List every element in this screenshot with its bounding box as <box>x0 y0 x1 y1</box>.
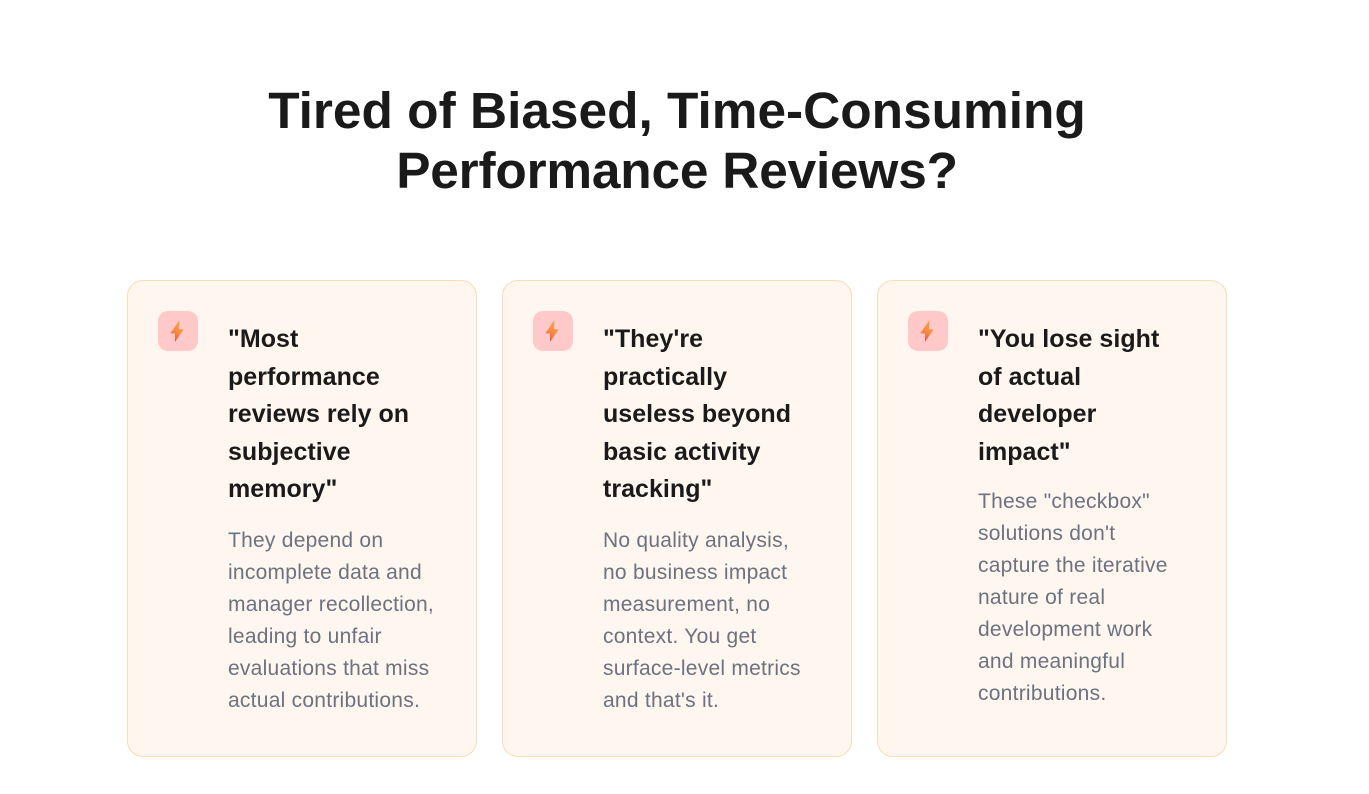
title <box>268 81 1086 199</box>
heading: reviews rely on <box>228 400 409 428</box>
title: Performance Reviews? <box>396 141 958 199</box>
panel: activity tracking <box>502 280 852 757</box>
icon: lightning bolt <box>908 311 948 351</box>
text block: evaluations that miss <box>228 657 429 680</box>
title: Tired of Biased, Time-Consuming <box>268 81 1086 139</box>
text block: no business impact <box>603 561 787 584</box>
text block: development work <box>978 618 1152 641</box>
icon: lightning bolt <box>158 311 198 351</box>
icon: lightning bolt <box>533 311 573 351</box>
text block: actual contributions. <box>228 689 420 712</box>
heading <box>228 325 409 503</box>
text block: and that's it. <box>603 689 719 712</box>
text block: manager recollection, <box>228 593 434 616</box>
text block: capture the iterative <box>978 554 1168 577</box>
heading: impact" <box>978 438 1071 466</box>
heading: tracking" <box>603 475 712 503</box>
heading: "Most <box>228 325 298 353</box>
text block: These "checkbox" <box>978 490 1150 513</box>
heading: memory" <box>228 475 337 503</box>
heading: performance <box>228 362 380 390</box>
panel: developer impact <box>877 280 1227 757</box>
text block <box>978 490 1168 705</box>
text block: No quality analysis, <box>603 529 789 552</box>
heading <box>978 325 1160 466</box>
heading: developer <box>978 400 1096 428</box>
heading: "They're <box>603 325 703 353</box>
text block: context. You get <box>603 625 756 648</box>
heading: practically <box>603 362 727 390</box>
text block: incomplete data and <box>228 561 422 584</box>
text block: solutions don't <box>978 522 1115 545</box>
heading: subjective <box>228 438 351 466</box>
heading: of actual <box>978 362 1081 390</box>
heading: basic activity <box>603 438 760 466</box>
text block: surface-level metrics <box>603 657 801 680</box>
text block: contributions. <box>978 682 1106 705</box>
text block: and meaningful <box>978 650 1125 673</box>
panel: subjective memory <box>127 280 477 757</box>
heading: useless beyond <box>603 400 791 428</box>
text block <box>228 529 434 712</box>
text block: They depend on <box>228 529 383 552</box>
text block: nature of real <box>978 586 1105 609</box>
text block <box>603 529 801 712</box>
text block: leading to unfair <box>228 625 382 648</box>
heading: "You lose sight <box>978 325 1159 353</box>
text block: measurement, no <box>603 593 770 616</box>
heading <box>603 325 791 503</box>
